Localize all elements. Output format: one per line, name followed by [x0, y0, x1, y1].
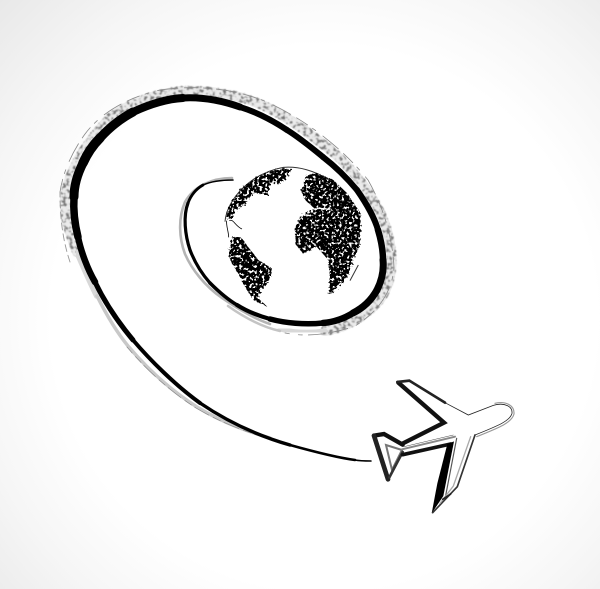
airplane [373, 380, 514, 513]
sketchy grey halo around the spiral [60, 88, 394, 439]
outer halo: large orbit [60, 88, 394, 439]
globe outline arc [225, 167, 360, 281]
North America and Greenland [226, 168, 293, 218]
fuselage top and nose [445, 403, 512, 435]
Europe and Asia [301, 173, 361, 233]
tail [374, 434, 403, 445]
Africa [295, 209, 361, 295]
Central America outline [227, 220, 242, 237]
plane fuselage fill [373, 380, 513, 513]
continents [226, 168, 361, 307]
South America [229, 237, 272, 307]
lower wing [403, 444, 451, 455]
globe [225, 167, 361, 307]
black spiral flight path [74, 98, 383, 461]
upper wing [398, 383, 444, 444]
inner halo: start of spiral [180, 178, 270, 324]
